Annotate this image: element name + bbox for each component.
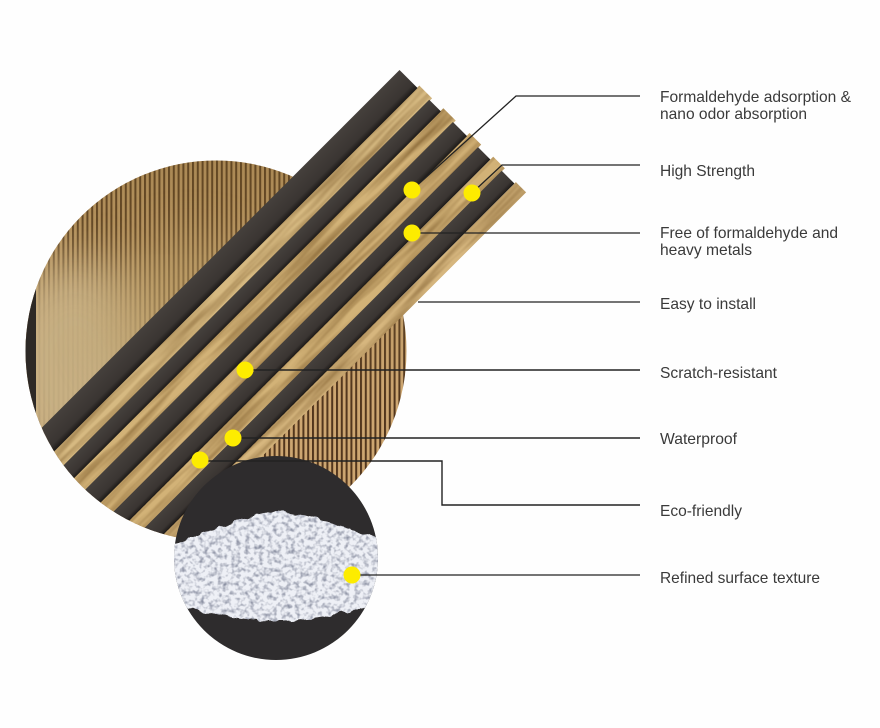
- callout: free of formaldehyde: Free of formaldehyde and: [660, 225, 838, 242]
- callout: easy to install: Easy to install: [660, 296, 756, 313]
- callout: formaldehyde adsorption: [404, 89, 851, 198]
- callout: free of formaldehyde: [404, 224, 838, 259]
- callout: formaldehyde adsorption: Formaldehyde adsorption &: [660, 89, 851, 106]
- callout: refined surface texture: [344, 566, 820, 587]
- callout: waterproof: [224, 430, 738, 448]
- callout: high strength: [464, 163, 755, 202]
- callout: refined surface texture: Refined surface texture: [660, 570, 820, 587]
- dark slats: [42, 70, 514, 534]
- callout: free of formaldehyde: heavy metals: [660, 242, 752, 259]
- callout: scratch-resistant: [236, 362, 778, 382]
- wood slats: [54, 86, 526, 538]
- infographic: panel features diagram: [26, 70, 851, 660]
- callout: formaldehyde adsorption: nano odor absorption: [660, 106, 807, 123]
- wood and dark panel: [42, 70, 526, 538]
- callout: eco-friendly: Eco-friendly: [660, 503, 742, 520]
- callout: scratch-resistant: Scratch-resistant: [660, 365, 778, 382]
- callout: eco-friendly: [192, 452, 742, 520]
- callout: high strength: High Strength: [660, 163, 755, 180]
- small circle: white pellets: [174, 456, 378, 660]
- callout: waterproof: Waterproof: [660, 431, 738, 448]
- large circle: slatted wall photo: [0, 160, 409, 544]
